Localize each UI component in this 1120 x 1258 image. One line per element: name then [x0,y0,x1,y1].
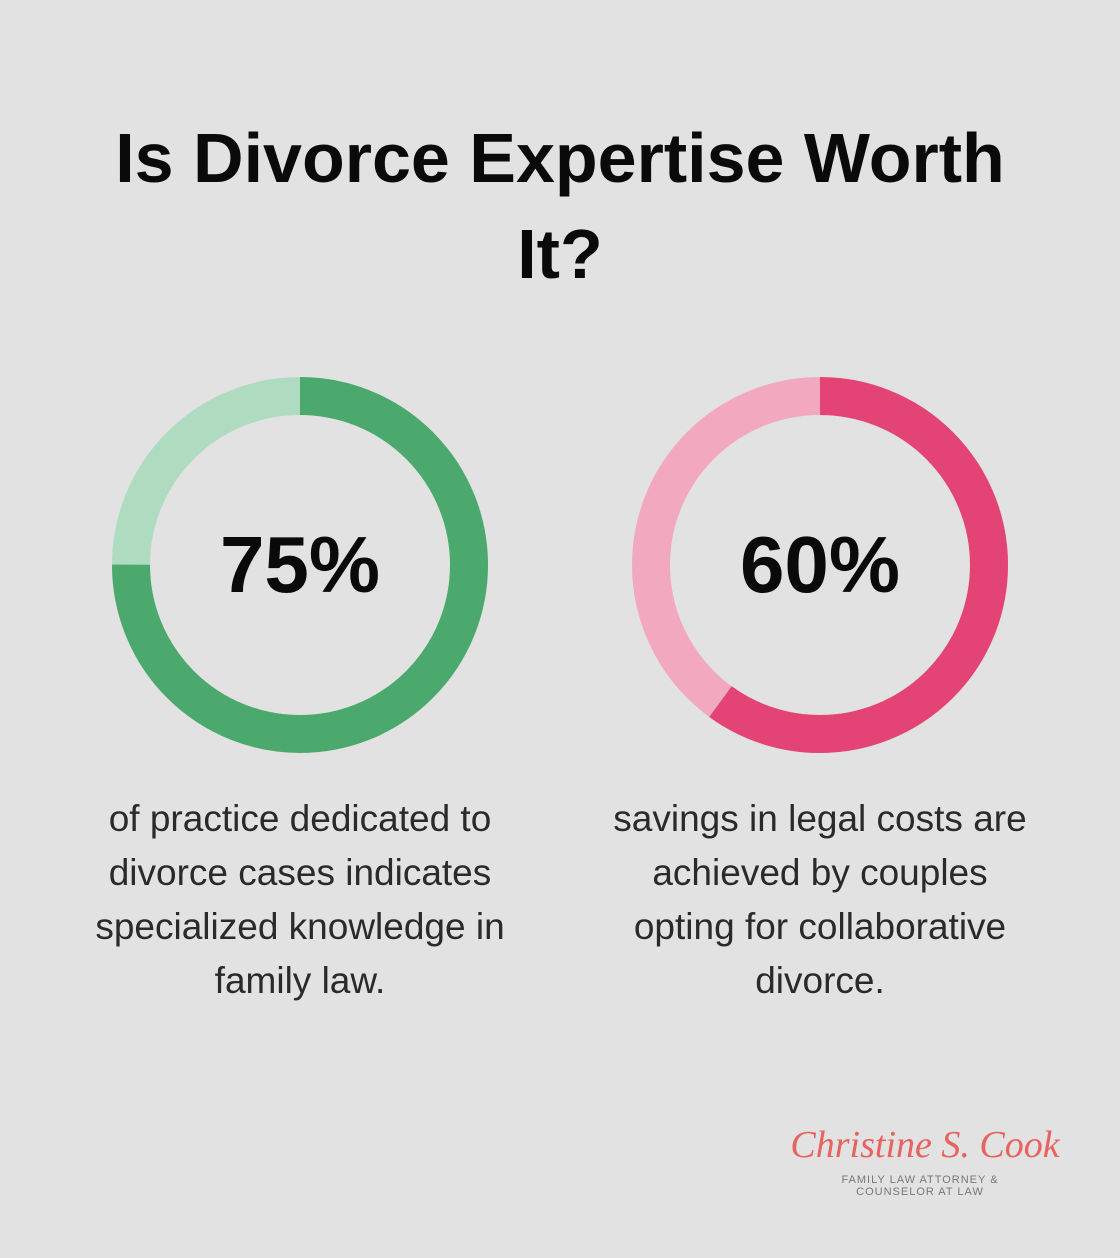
text: 75% description: divorce cases indicates [109,852,491,893]
donut chart: 60%: 60% [740,520,900,609]
text: 60% description: divorce. [755,960,885,1001]
donut chart: 60% [632,377,1008,753]
title: Is Divorce Expertise Worth [115,119,1005,197]
text: 60% description: savings in legal costs are [613,798,1027,839]
title: It? [517,215,603,293]
donut chart: 75% [112,377,488,753]
logo: Christine S. Cook [790,1124,1060,1166]
text: 75% description: family law. [215,960,385,1001]
text: 75% description: of practice dedicated to [109,798,491,839]
logo: COUNSELOR AT LAW [856,1186,984,1198]
text: 60% description: opting for collaborative [634,906,1006,947]
title [115,119,1005,293]
text: 60% description [613,798,1027,1001]
text: 60% description: achieved by couples [652,852,988,893]
donut chart: 75%: 75% [220,520,380,609]
logo: FAMILY LAW ATTORNEY & [841,1174,999,1186]
text: 75% description [95,798,505,1001]
text: 75% description: specialized knowledge in [95,906,505,947]
logo [790,1124,1060,1198]
